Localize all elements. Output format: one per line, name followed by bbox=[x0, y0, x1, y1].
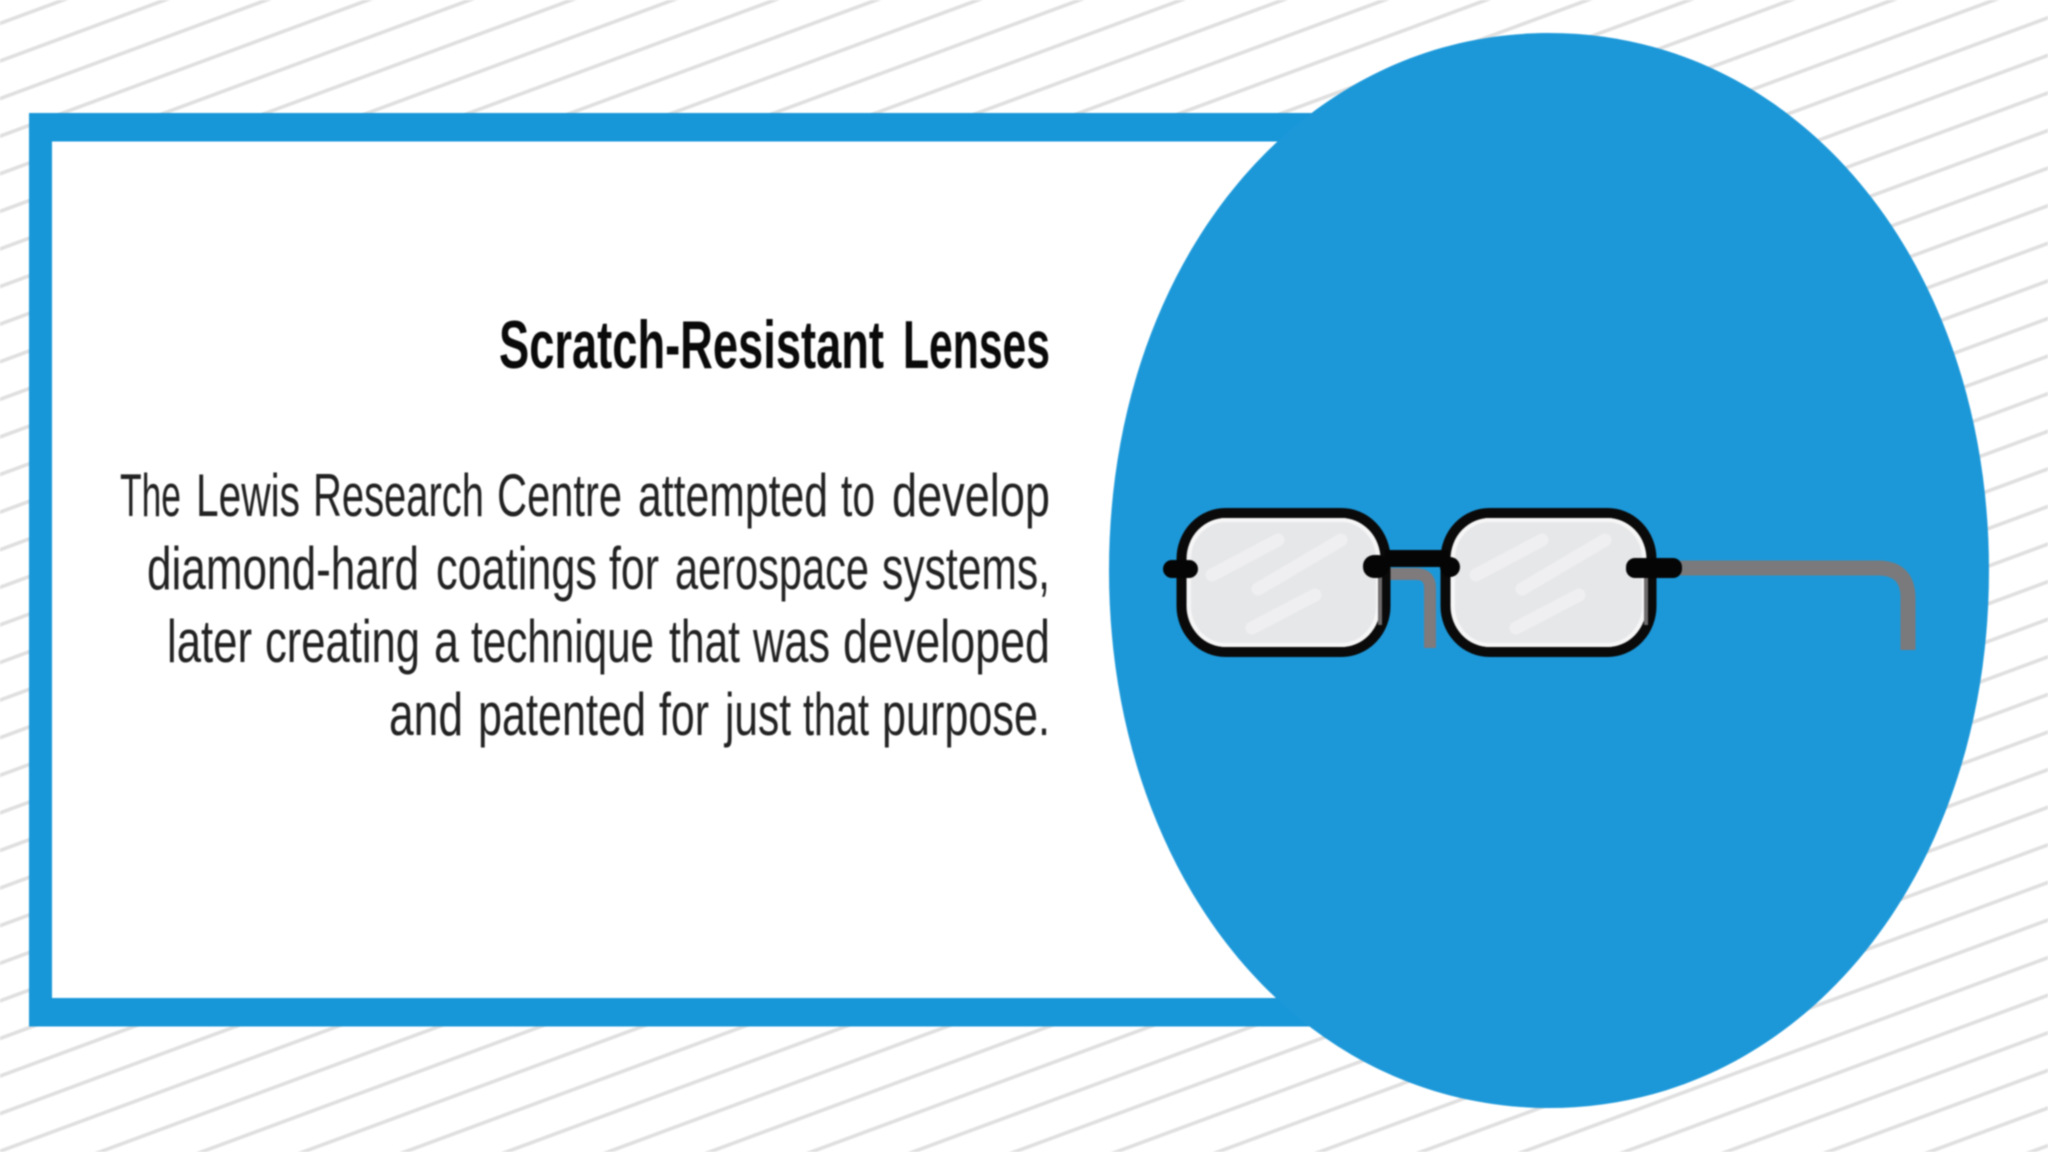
body text: Research bbox=[313, 462, 484, 529]
near temple arm bbox=[1680, 568, 1908, 650]
right lens bbox=[1446, 513, 1652, 652]
body text: patented bbox=[478, 681, 646, 748]
far temple arm (behind the bridge) bbox=[1385, 574, 1430, 648]
body text: was bbox=[752, 608, 830, 675]
body text: developed bbox=[843, 608, 1050, 675]
body text: later bbox=[167, 608, 252, 675]
body text: systems, bbox=[882, 535, 1050, 602]
body text: attempted bbox=[638, 462, 828, 529]
hinge: right-lens inner bbox=[1440, 557, 1460, 577]
body text: creating bbox=[265, 608, 420, 675]
heading: Lenses bbox=[903, 307, 1050, 383]
body text bbox=[120, 462, 1050, 748]
body text: that bbox=[803, 681, 869, 748]
heading: Scratch-Resistant bbox=[499, 307, 884, 383]
bridge bbox=[1385, 550, 1449, 567]
body text: purpose. bbox=[882, 681, 1050, 748]
hinge: right outer bbox=[1626, 558, 1682, 578]
body text: for bbox=[659, 681, 709, 748]
hinge: left inner bbox=[1363, 555, 1389, 578]
body text: aerospace bbox=[675, 535, 869, 602]
body text: develop bbox=[892, 462, 1050, 529]
left lens bbox=[1182, 513, 1386, 652]
body text: a bbox=[434, 608, 459, 675]
body text: Centre bbox=[497, 462, 622, 529]
body text: to bbox=[841, 462, 875, 529]
hinge: left outer bbox=[1163, 560, 1198, 578]
body text: for bbox=[609, 535, 659, 602]
body text: technique bbox=[471, 608, 654, 675]
body text: just bbox=[724, 681, 791, 748]
icon: glasses bbox=[1163, 513, 1908, 652]
body text: coatings bbox=[436, 535, 597, 602]
body text: Lewis bbox=[196, 462, 300, 529]
body text: diamond-hard bbox=[147, 535, 419, 602]
body text: that bbox=[669, 608, 740, 675]
body text: and bbox=[389, 681, 463, 748]
blue circle bbox=[1109, 33, 1989, 1108]
body text: The bbox=[120, 462, 181, 529]
panel: text box with blue frame bbox=[29, 113, 1432, 1026]
